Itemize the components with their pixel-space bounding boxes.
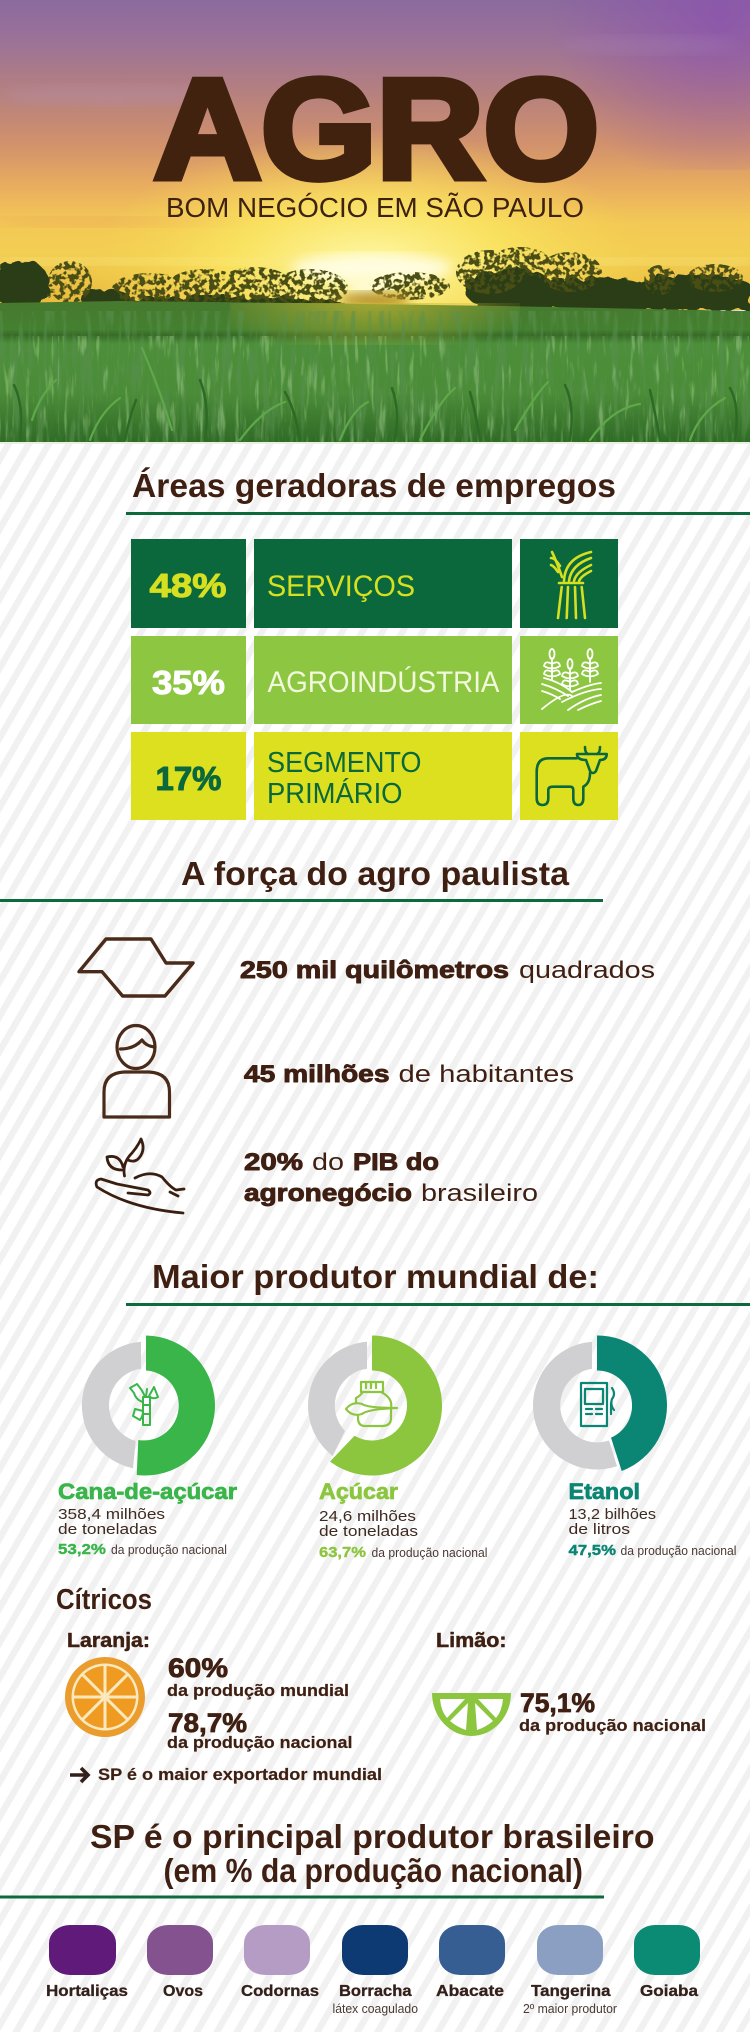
- item: ovos: [147, 1925, 213, 2000]
- stat: population: [244, 1061, 574, 1088]
- subtitle: BOM NEGÓCIO EM SÃO PAULO: [166, 192, 584, 223]
- row: segmento primário: PRIMÁRIO: [267, 777, 402, 810]
- item: tangerina: Tangerina: [531, 1983, 611, 2000]
- item: borracha: [332, 1925, 418, 2016]
- stat: PIB: brasileiro: [421, 1180, 538, 1207]
- row: agroindústria: AGROINDÚSTRIA: [268, 666, 500, 699]
- icon: São Paulo state outline: [79, 939, 193, 996]
- panel: maior produtor mundial: [58, 1258, 750, 1561]
- stat: PIB: [244, 1149, 538, 1207]
- row: segmento primário: 17%: [156, 760, 222, 797]
- donut: cana-de-açúcar: de toneladas: [58, 1521, 157, 1538]
- item: tangerina: [523, 1925, 617, 2016]
- stat: area: quadrados: [519, 957, 655, 984]
- block: laranja: SP é o maior exportador mundial: [98, 1766, 382, 1784]
- block: limão: da produção nacional: [519, 1716, 706, 1735]
- donut: açúcar: 24,6 milhões: [319, 1508, 416, 1525]
- block: laranja: da produção nacional: [167, 1733, 352, 1752]
- donut: açúcar: Açúcar: [319, 1479, 398, 1504]
- block: laranja: Laranja:: [67, 1630, 150, 1652]
- panel: cítricos: [56, 1584, 706, 1784]
- item: codornas: Codornas: [241, 1983, 319, 2000]
- row: agroindústria: 35%: [152, 664, 225, 701]
- donut: açúcar: de toneladas: [319, 1523, 418, 1540]
- sugarcane field: [0, 301, 750, 443]
- item: goiaba: [634, 1925, 700, 2000]
- item: tangerina: 2º maior produtor: [523, 2002, 617, 2016]
- item: borracha: látex coagulado: [332, 2002, 418, 2016]
- donut: etanol: da produção nacional: [620, 1544, 736, 1558]
- row: segmento primário: SEGMENTO: [267, 747, 422, 779]
- block: laranja: da produção mundial: [167, 1681, 349, 1700]
- icon: sugarcane: [130, 1384, 158, 1425]
- heading: Maior produtor mundial de:: [152, 1258, 599, 1295]
- icon: crops on hills: [542, 649, 601, 710]
- donut: etanol: de litros: [568, 1521, 630, 1538]
- icon: wheat sheaf: [551, 552, 591, 618]
- icon: lime wedge: [432, 1693, 511, 1736]
- donut: cana-de-açúcar: [58, 1336, 237, 1558]
- donut: cana-de-açúcar: Cana-de-açúcar: [58, 1479, 237, 1504]
- tree line: [0, 247, 750, 312]
- heading: Cítricos: [56, 1584, 152, 1616]
- heading: A força do agro paulista: [181, 855, 570, 892]
- donut: cana-de-açúcar: 53,2%: [58, 1541, 106, 1558]
- background: diagonal stripes: [0, 443, 750, 2032]
- stat: population: 45 milhões: [244, 1061, 390, 1088]
- panel: a força do agro paulista: [0, 855, 655, 1213]
- subheading: (em % da produção nacional): [164, 1852, 583, 1889]
- donut: cana-de-açúcar: 358,4 milhões: [58, 1506, 165, 1523]
- icon: orange slice: [65, 1657, 145, 1737]
- row: serviços: [131, 539, 618, 628]
- donut: cana-de-açúcar: da produção nacional: [111, 1543, 227, 1557]
- icon: plant on hand: [96, 1139, 184, 1213]
- row: serviços: 48%: [150, 567, 226, 604]
- block: limão: [432, 1630, 706, 1736]
- donut: açúcar: [308, 1336, 488, 1561]
- item: codornas: [241, 1925, 319, 2000]
- block: limão: 75,1%: [520, 1688, 595, 1718]
- stat: PIB: PIB do: [353, 1149, 439, 1176]
- stat: PIB: do: [312, 1149, 344, 1176]
- donut: açúcar: da produção nacional: [372, 1546, 488, 1560]
- block: limão: Limão:: [436, 1630, 506, 1652]
- stat: area: [240, 957, 655, 984]
- panel: sp principal produtor: [0, 1818, 700, 2016]
- heading: Áreas geradoras de empregos: [132, 467, 616, 504]
- block: laranja: 78,7%: [168, 1708, 247, 1738]
- arrow: [70, 1768, 88, 1782]
- icon: cow: [537, 747, 607, 805]
- panel: áreas geradoras de empregos: [126, 467, 750, 820]
- row: serviços: SERVIÇOS: [267, 570, 415, 603]
- item: borracha: Borracha: [339, 1983, 412, 2000]
- donut: etanol: 47,5%: [568, 1542, 616, 1559]
- item: ovos: Ovos: [163, 1983, 203, 2000]
- donut: açúcar: 63,7%: [319, 1544, 366, 1561]
- title: AGRO: [154, 50, 599, 209]
- donut: etanol: Etanol: [568, 1479, 640, 1504]
- block: laranja: 60%: [168, 1653, 228, 1683]
- icon: fuel pump: [581, 1383, 614, 1426]
- stat: PIB: 20%: [244, 1149, 303, 1176]
- item: abacate: Abacate: [436, 1983, 504, 2000]
- block: laranja: [65, 1630, 382, 1784]
- stat: area: 250 mil quilômetros: [240, 957, 509, 984]
- icon: person: [104, 1026, 170, 1117]
- item: abacate: [436, 1925, 505, 2000]
- hero photo: sunset over sugarcane field: [0, 0, 750, 444]
- item: goiaba: Goiaba: [640, 1983, 698, 2000]
- donut: etanol: [533, 1336, 736, 1559]
- row: agroindústria: [131, 636, 618, 724]
- item: hortaliças: [46, 1925, 128, 2000]
- heading: SP é o principal produtor brasileiro: [90, 1818, 654, 1855]
- item: hortaliças: Hortaliças: [46, 1983, 128, 2000]
- icon: sugar jar with spoon: [346, 1382, 397, 1426]
- stat: population: de habitantes: [398, 1061, 574, 1088]
- row: segmento primário: [131, 732, 618, 820]
- donut: etanol: 13,2 bilhões: [568, 1506, 656, 1523]
- stat: PIB: agronegócio: [244, 1180, 412, 1207]
